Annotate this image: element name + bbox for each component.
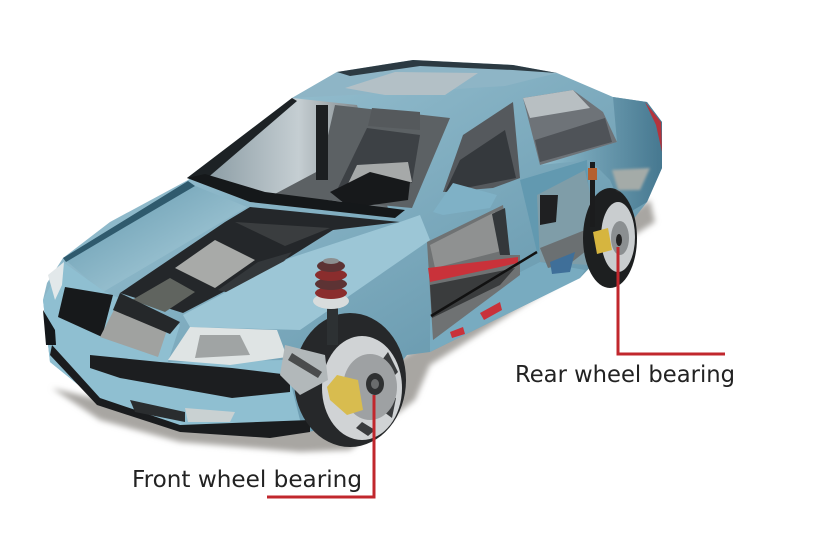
door mirror — [433, 183, 497, 215]
rear door lower shade — [520, 160, 590, 252]
car body — [43, 60, 662, 432]
red sill beams — [428, 257, 518, 338]
tail light — [645, 102, 662, 152]
rear quarter panel — [540, 97, 662, 215]
windshield — [187, 98, 390, 215]
roof — [292, 62, 557, 98]
callout: front wheel bearing leader — [267, 395, 374, 497]
lower body sill — [430, 262, 585, 352]
cabin interior and front seat — [187, 105, 450, 218]
label: rear wheel bearing: Rear wheel bearing — [515, 362, 735, 388]
side windows — [443, 90, 617, 192]
sunroof — [345, 72, 478, 95]
front suspension and arm — [280, 305, 363, 415]
engine bay — [120, 207, 400, 313]
front door window — [443, 102, 520, 192]
front door cutaway with seat — [427, 205, 520, 340]
rear wheel — [583, 188, 637, 288]
callout: rear wheel bearing leader — [618, 247, 725, 354]
hood — [63, 181, 247, 292]
rear window — [523, 90, 617, 165]
ground shadow — [52, 200, 655, 452]
front fascia: grille, radiator, bumper — [43, 262, 310, 438]
rear suspension strut and caliper — [588, 162, 612, 254]
front fender highlight — [183, 215, 430, 330]
front spring — [313, 258, 349, 309]
black sill line — [431, 252, 537, 316]
rear door cutaway with mechanicals — [537, 170, 600, 274]
front wheel — [294, 313, 406, 447]
headlight — [168, 327, 287, 365]
label: front wheel bearing: Front wheel bearing — [132, 467, 362, 493]
exhaust highlight — [612, 168, 650, 190]
